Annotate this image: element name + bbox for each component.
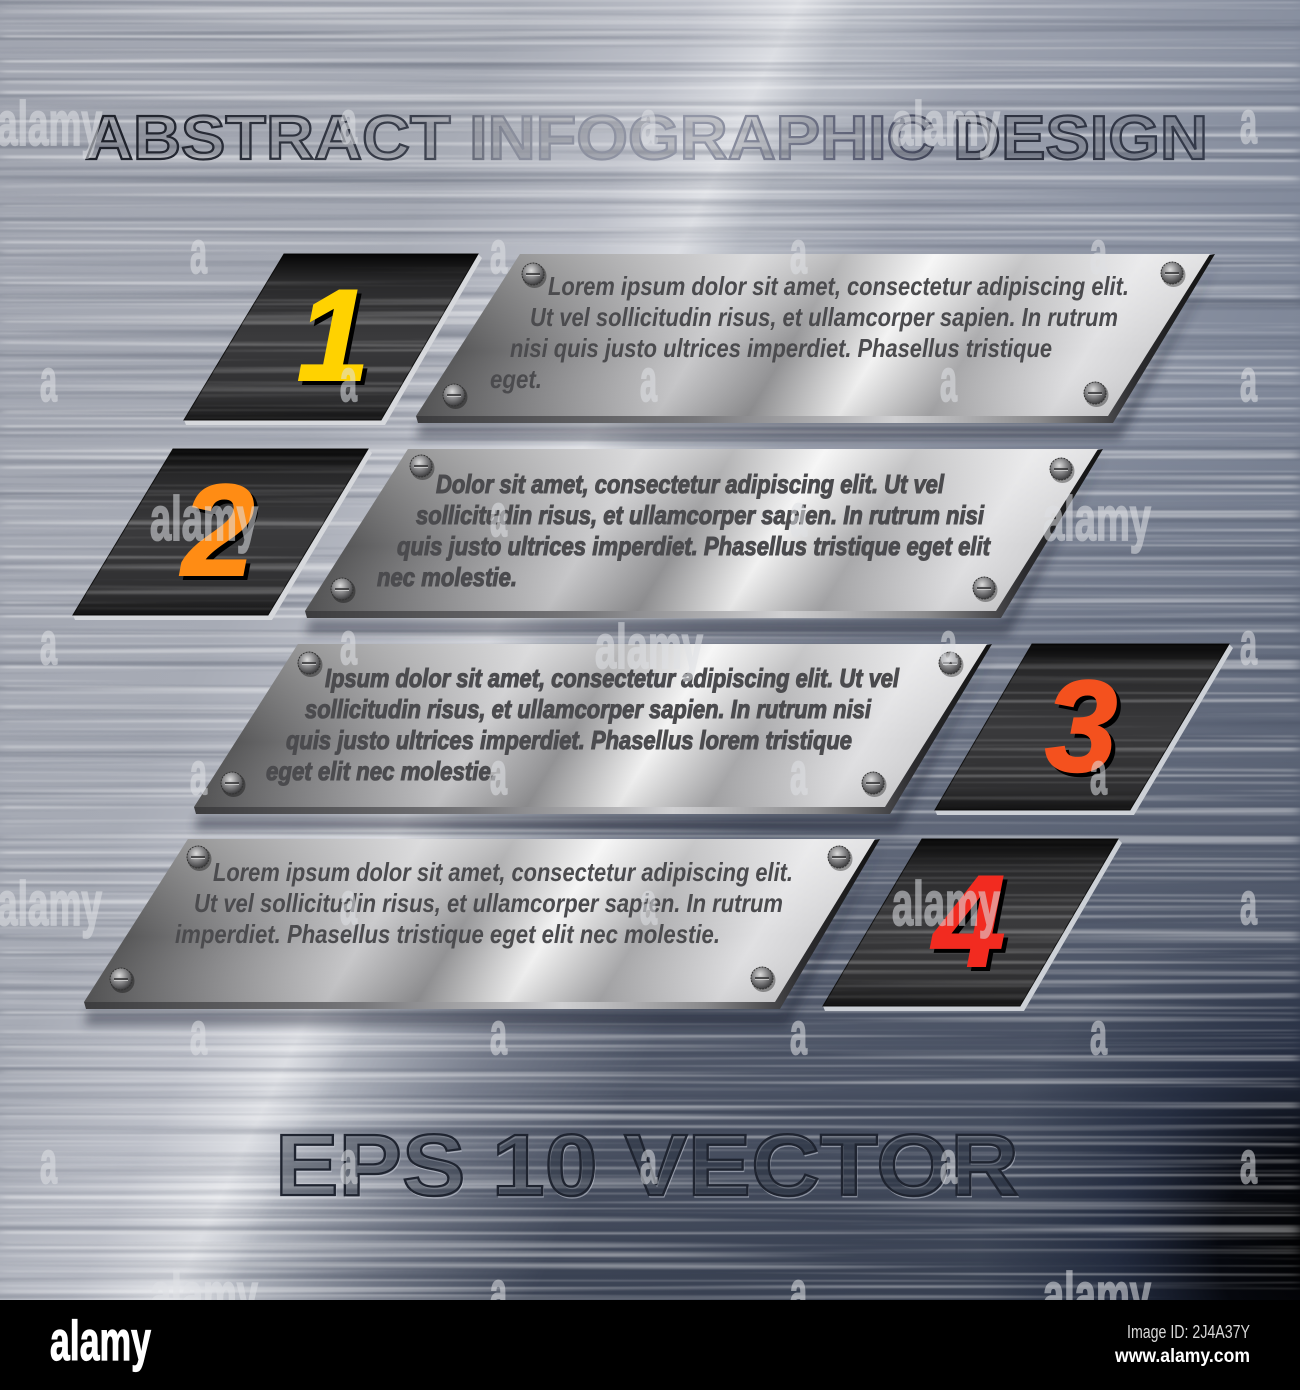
watermarks: alamy — [1043, 485, 1151, 554]
screws 4 — [110, 846, 852, 993]
footer band — [0, 1300, 1300, 1390]
watermarks: a — [1240, 89, 1257, 156]
number 2: 2 — [179, 457, 254, 603]
text block 1: Lorem ipsum dolor sit amet, consectetur adipiscing elit. — [548, 271, 1129, 301]
watermarks: a — [940, 1129, 957, 1196]
watermarks: a — [640, 89, 657, 156]
footer logo: alamy — [50, 1309, 151, 1372]
watermarks: a — [1240, 1129, 1257, 1196]
text block 4: Ut vel sollicitudin risus, et ullamcorper sapien. In rutrum — [194, 888, 783, 918]
text block 3: eget elit nec molestie. — [266, 756, 497, 786]
text block 1 — [490, 271, 1129, 394]
title: ABSTRACT INFOGRAPHIC DESIGN — [85, 104, 1208, 173]
watermarks: a — [340, 1129, 357, 1196]
number 3: 3 — [1045, 653, 1117, 799]
watermarks: a — [490, 1000, 507, 1067]
plate 4 — [84, 839, 884, 1027]
text block 2 — [377, 469, 991, 592]
text block 3: quis justo ultrices imperdiet. Phasellus lorem tristique — [286, 725, 852, 755]
watermarks: a — [790, 1259, 807, 1326]
watermarks: alamy — [0, 90, 102, 159]
text block 3: Ipsum dolor sit amet, consectetur adipiscing elit. Ut vel — [325, 663, 900, 693]
subtitle: EPS 10 VECTOR — [275, 1117, 1019, 1214]
text block 2: sollicitudin risus, et ullamcorper sapien. In rutrum nisi — [416, 500, 985, 530]
screws 2 — [331, 455, 1074, 603]
watermarks: a — [1240, 347, 1257, 414]
text block 2: nec molestie. — [377, 562, 517, 592]
watermarks: a — [640, 1129, 657, 1196]
hole 4 with number — [820, 839, 1122, 1011]
watermarks: a — [640, 347, 657, 414]
image id: Image ID: 2J4A37Y — [1127, 1322, 1250, 1342]
watermarks: a — [640, 870, 657, 937]
plate 1 — [416, 254, 1220, 440]
watermarks: a — [1240, 610, 1257, 677]
watermarks: a — [40, 347, 57, 414]
number 3: 3 — [1049, 657, 1121, 803]
watermarks: alamy — [595, 613, 703, 682]
plate 2 — [305, 449, 1106, 636]
text block 4: imperdiet. Phasellus tristique eget elit nec molestie. — [175, 919, 720, 949]
watermarks: a — [490, 219, 507, 286]
watermarks: a — [340, 89, 357, 156]
watermarks: a — [1090, 219, 1107, 286]
number 4: 4 — [930, 848, 1005, 994]
watermarks: a — [490, 1259, 507, 1326]
watermarks: a — [940, 347, 957, 414]
watermarks: a — [940, 610, 957, 677]
watermarks: a — [40, 1129, 57, 1196]
watermarks: alamy — [892, 870, 1000, 939]
watermarks: a — [340, 870, 357, 937]
watermarks: a — [790, 219, 807, 286]
watermarks: a — [190, 740, 207, 807]
watermarks: alamy — [0, 870, 102, 939]
watermarks: a — [1240, 870, 1257, 937]
hole 1 with number — [180, 254, 482, 425]
watermarks: a — [190, 219, 207, 286]
website: www.alamy.com — [1114, 1346, 1250, 1367]
watermarks: alamy — [150, 1261, 258, 1330]
watermarks: a — [40, 610, 57, 677]
screws 1 — [443, 262, 1186, 409]
watermarks: alamy — [892, 90, 1000, 159]
text block 4: Lorem ipsum dolor sit amet, consectetur adipiscing elit. — [213, 857, 793, 887]
text block 1: nisi quis justo ultrices imperdiet. Phasellus tristique — [510, 333, 1052, 363]
hole 3 with number — [930, 644, 1233, 815]
watermarks: a — [490, 740, 507, 807]
watermarks: a — [340, 347, 357, 414]
watermarks: a — [490, 482, 507, 549]
text block 4 — [175, 857, 793, 949]
watermarks: a — [790, 740, 807, 807]
number 4: 4 — [934, 852, 1009, 998]
watermarks: a — [790, 482, 807, 549]
number 2: 2 — [183, 461, 258, 607]
watermarks: alamy — [1043, 1261, 1151, 1330]
hole 2 with number — [70, 449, 372, 620]
text block 2: quis justo ultrices imperdiet. Phasellus tristique eget elit — [397, 531, 991, 561]
plate 3 — [194, 644, 995, 832]
watermarks: a — [790, 1000, 807, 1067]
subtitle: EPS 10 VECTOR — [276, 1119, 1020, 1216]
watermarks: a — [1090, 1000, 1107, 1067]
text block 1: eget. — [490, 364, 542, 394]
watermarks: alamy — [150, 485, 258, 554]
text block 3 — [266, 663, 900, 786]
watermarks: a — [1090, 740, 1107, 807]
watermarks: a — [340, 610, 357, 677]
text block 2: Dolor sit amet, consectetur adipiscing elit. Ut vel — [436, 469, 945, 499]
number 1: 1 — [297, 262, 369, 408]
text block 1: Ut vel sollicitudin risus, et ullamcorper sapien. In rutrum — [530, 302, 1118, 332]
number 1: 1 — [301, 266, 373, 412]
screws 3 — [221, 652, 964, 797]
watermarks: a — [190, 1000, 207, 1067]
text block 3: sollicitudin risus, et ullamcorper sapien. In rutrum nisi — [305, 694, 872, 724]
